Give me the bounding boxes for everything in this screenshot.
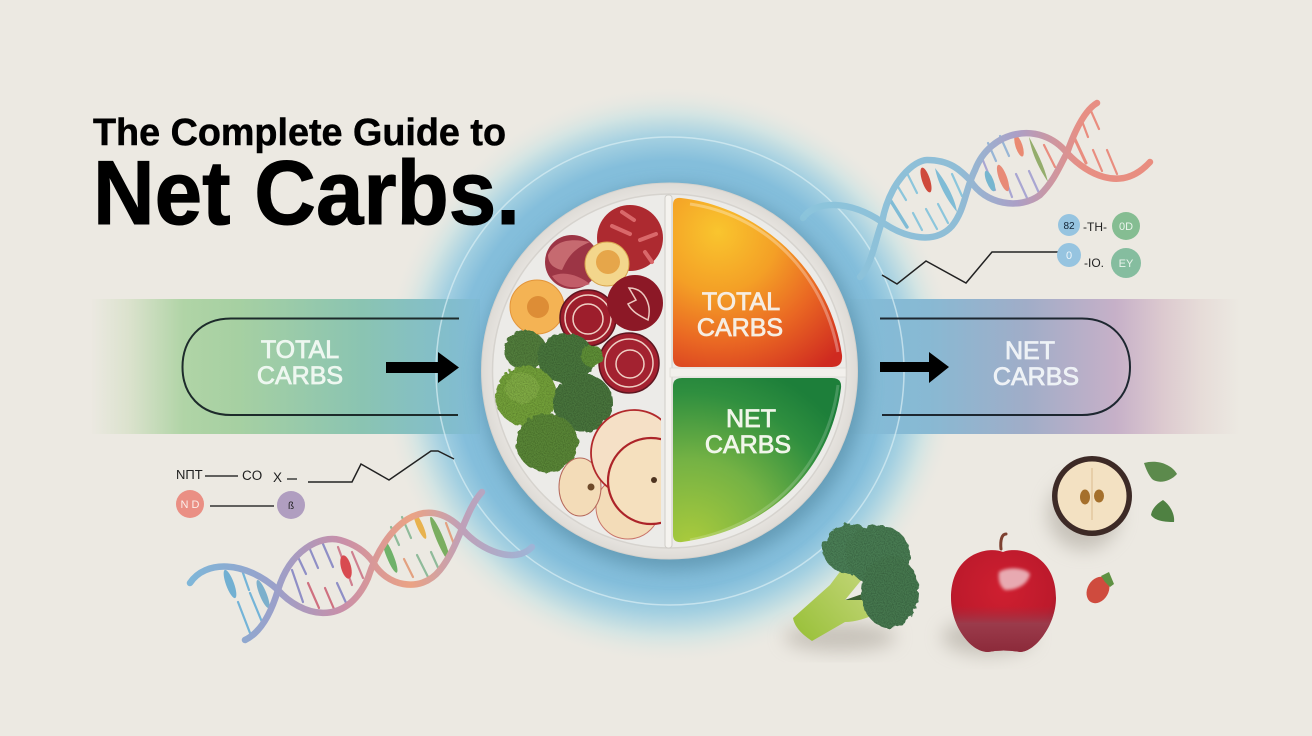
thin halo ring: [436, 137, 904, 605]
inner arc: [573, 304, 603, 334]
title line 2: Net Carbs.: [93, 143, 520, 244]
flow: total carbs pill with arrow: [182, 318, 459, 415]
wedge fill: [673, 378, 841, 542]
lower slice marks: [605, 339, 653, 387]
front slice: [606, 436, 661, 526]
floret middle left: [495, 366, 557, 426]
red base: [918, 166, 934, 194]
light blue wedge base: [935, 168, 957, 212]
annotation: bottom left labels and line: [176, 451, 454, 519]
node one value: 0D: [1119, 221, 1133, 233]
strand two: [860, 103, 1097, 277]
open pill outline left: [182, 318, 459, 415]
coral bases: [1012, 134, 1026, 158]
horizontal divider: [670, 368, 846, 377]
strand one: [190, 513, 532, 613]
dark red slice mark: [628, 288, 649, 320]
broccoli: [784, 524, 919, 651]
coral node text: N D: [181, 499, 200, 511]
food: apple slices: [558, 409, 661, 540]
node two text: 0: [1066, 250, 1072, 262]
apple stem: [1001, 534, 1006, 549]
food: broccoli on plate: [495, 330, 613, 472]
front slice seed: [651, 477, 657, 483]
node one text: 82: [1063, 221, 1075, 232]
red slice marks: [612, 212, 656, 262]
broccoli stalk gap: [845, 592, 868, 600]
apple: [942, 534, 1056, 655]
red top slice: [597, 205, 663, 271]
plate: [481, 183, 865, 570]
line chart stroke: [308, 451, 454, 482]
red ring slice: [560, 290, 616, 346]
strawberry leaf: [1101, 572, 1114, 587]
yellow base: [412, 512, 428, 540]
blue node two: [1057, 243, 1081, 267]
wedge label carbs: CARBS: [705, 431, 791, 459]
strand two: [245, 492, 482, 640]
half skin: [1052, 456, 1132, 536]
broccoli shadow: [784, 623, 896, 651]
mauve slice lower: [552, 274, 590, 287]
blue node one: [1058, 214, 1080, 236]
band: net carbs gradient: [850, 299, 1240, 434]
open pill outline right: [880, 318, 1130, 415]
arrow right: [386, 352, 459, 383]
apple shadow: [942, 619, 1034, 655]
outer arc: [565, 295, 611, 341]
coral node: [176, 490, 204, 518]
label io: -IO.: [1084, 256, 1104, 270]
purple node: [277, 491, 305, 519]
connector two: [210, 505, 274, 507]
label co: CO: [242, 468, 262, 483]
crown right: [861, 556, 919, 628]
floret bottom: [516, 414, 578, 472]
wedge label total: TOTAL: [702, 288, 780, 316]
seed left: [1080, 490, 1090, 504]
half shadow: [1048, 478, 1120, 550]
floret back: [581, 345, 603, 367]
purple node text: ß: [288, 501, 294, 512]
coral base two: [994, 163, 1012, 193]
small slice seed: [588, 484, 594, 490]
flow: net carbs pill with arrow: [880, 318, 1130, 415]
crown left: [823, 524, 879, 574]
wedge label carbs: CARBS: [697, 314, 783, 342]
small slice: [559, 458, 601, 516]
plate shadow: [481, 186, 865, 570]
apple lower tint: [951, 550, 1056, 652]
title line 1: The Complete Guide to: [93, 112, 506, 154]
wedge label net: NET: [726, 405, 776, 433]
label carbs: CARBS: [993, 363, 1079, 391]
dna helix: top right: [803, 103, 1150, 277]
connector: [205, 475, 238, 477]
orange slice centre: [527, 296, 549, 318]
blue base one: [221, 569, 239, 599]
title: [93, 112, 520, 244]
strand one: [803, 133, 1150, 237]
leaf upper: [1144, 462, 1177, 482]
line chart stroke: [882, 252, 1058, 284]
yellow slice: [585, 242, 629, 286]
wedge: net carbs: [673, 378, 841, 542]
red base: [338, 554, 354, 580]
seed right: [1094, 490, 1104, 502]
strawberry slice: [1082, 572, 1114, 607]
green node one: [1112, 212, 1140, 240]
red ring slice lower: [599, 333, 659, 393]
plate rim: [482, 183, 858, 559]
food: sliced beets and peaches: [510, 205, 663, 393]
label carbs: CARBS: [257, 362, 343, 390]
dash: [287, 478, 297, 480]
floret upper right: [538, 333, 594, 383]
label th: -TH-: [1083, 220, 1107, 234]
plate inner well: [492, 194, 846, 548]
annotation: top right labels and line: [882, 212, 1141, 284]
mauve slice: [545, 235, 599, 289]
blue halo behind the plate: [380, 85, 960, 665]
node two value: EY: [1119, 258, 1134, 270]
wedge fill: [673, 198, 842, 367]
helix rungs: [238, 517, 455, 633]
label nnt: NПT: [176, 467, 203, 482]
wedge highlight: [690, 204, 838, 352]
green base: [1029, 137, 1048, 182]
strawberry body: [1082, 573, 1114, 607]
label x: X: [273, 470, 282, 485]
outer arc: [605, 339, 653, 387]
crown top: [846, 525, 910, 585]
red ring slice marks: [565, 295, 611, 341]
apple highlight: [999, 568, 1030, 590]
dna helix: bottom left: [190, 492, 532, 640]
blue base: [983, 169, 997, 193]
broccoli stalk: [793, 565, 880, 641]
floret middle right: [553, 374, 613, 432]
wedge: total carbs: [673, 198, 842, 367]
green base: [380, 538, 400, 574]
label net: NET: [1005, 337, 1055, 365]
green base two: [427, 516, 453, 562]
apple half: [1048, 456, 1132, 550]
label total carbs: TOTAL: [261, 336, 339, 364]
green node two: [1111, 248, 1141, 278]
wedge highlight: [690, 385, 838, 540]
orange slice: [510, 280, 564, 334]
apple body: [951, 550, 1056, 652]
floret highlight: [505, 373, 539, 403]
vertical divider: [665, 195, 672, 548]
broccoli crown: [823, 524, 919, 628]
mauve slice inner: [548, 240, 590, 270]
yellow slice centre: [596, 250, 620, 274]
half flesh: [1058, 462, 1126, 530]
leaf lower: [1151, 500, 1174, 522]
helix rungs: [889, 111, 1117, 230]
blue base two: [254, 579, 272, 609]
dark red slice: [607, 275, 663, 331]
inner arc: [616, 350, 644, 378]
floret upper left: [504, 330, 546, 370]
band: total carbs gradient: [90, 299, 480, 434]
arrow right: [880, 352, 949, 383]
back slice: [596, 485, 656, 540]
large slice: [590, 409, 661, 488]
core line: [1091, 468, 1093, 520]
